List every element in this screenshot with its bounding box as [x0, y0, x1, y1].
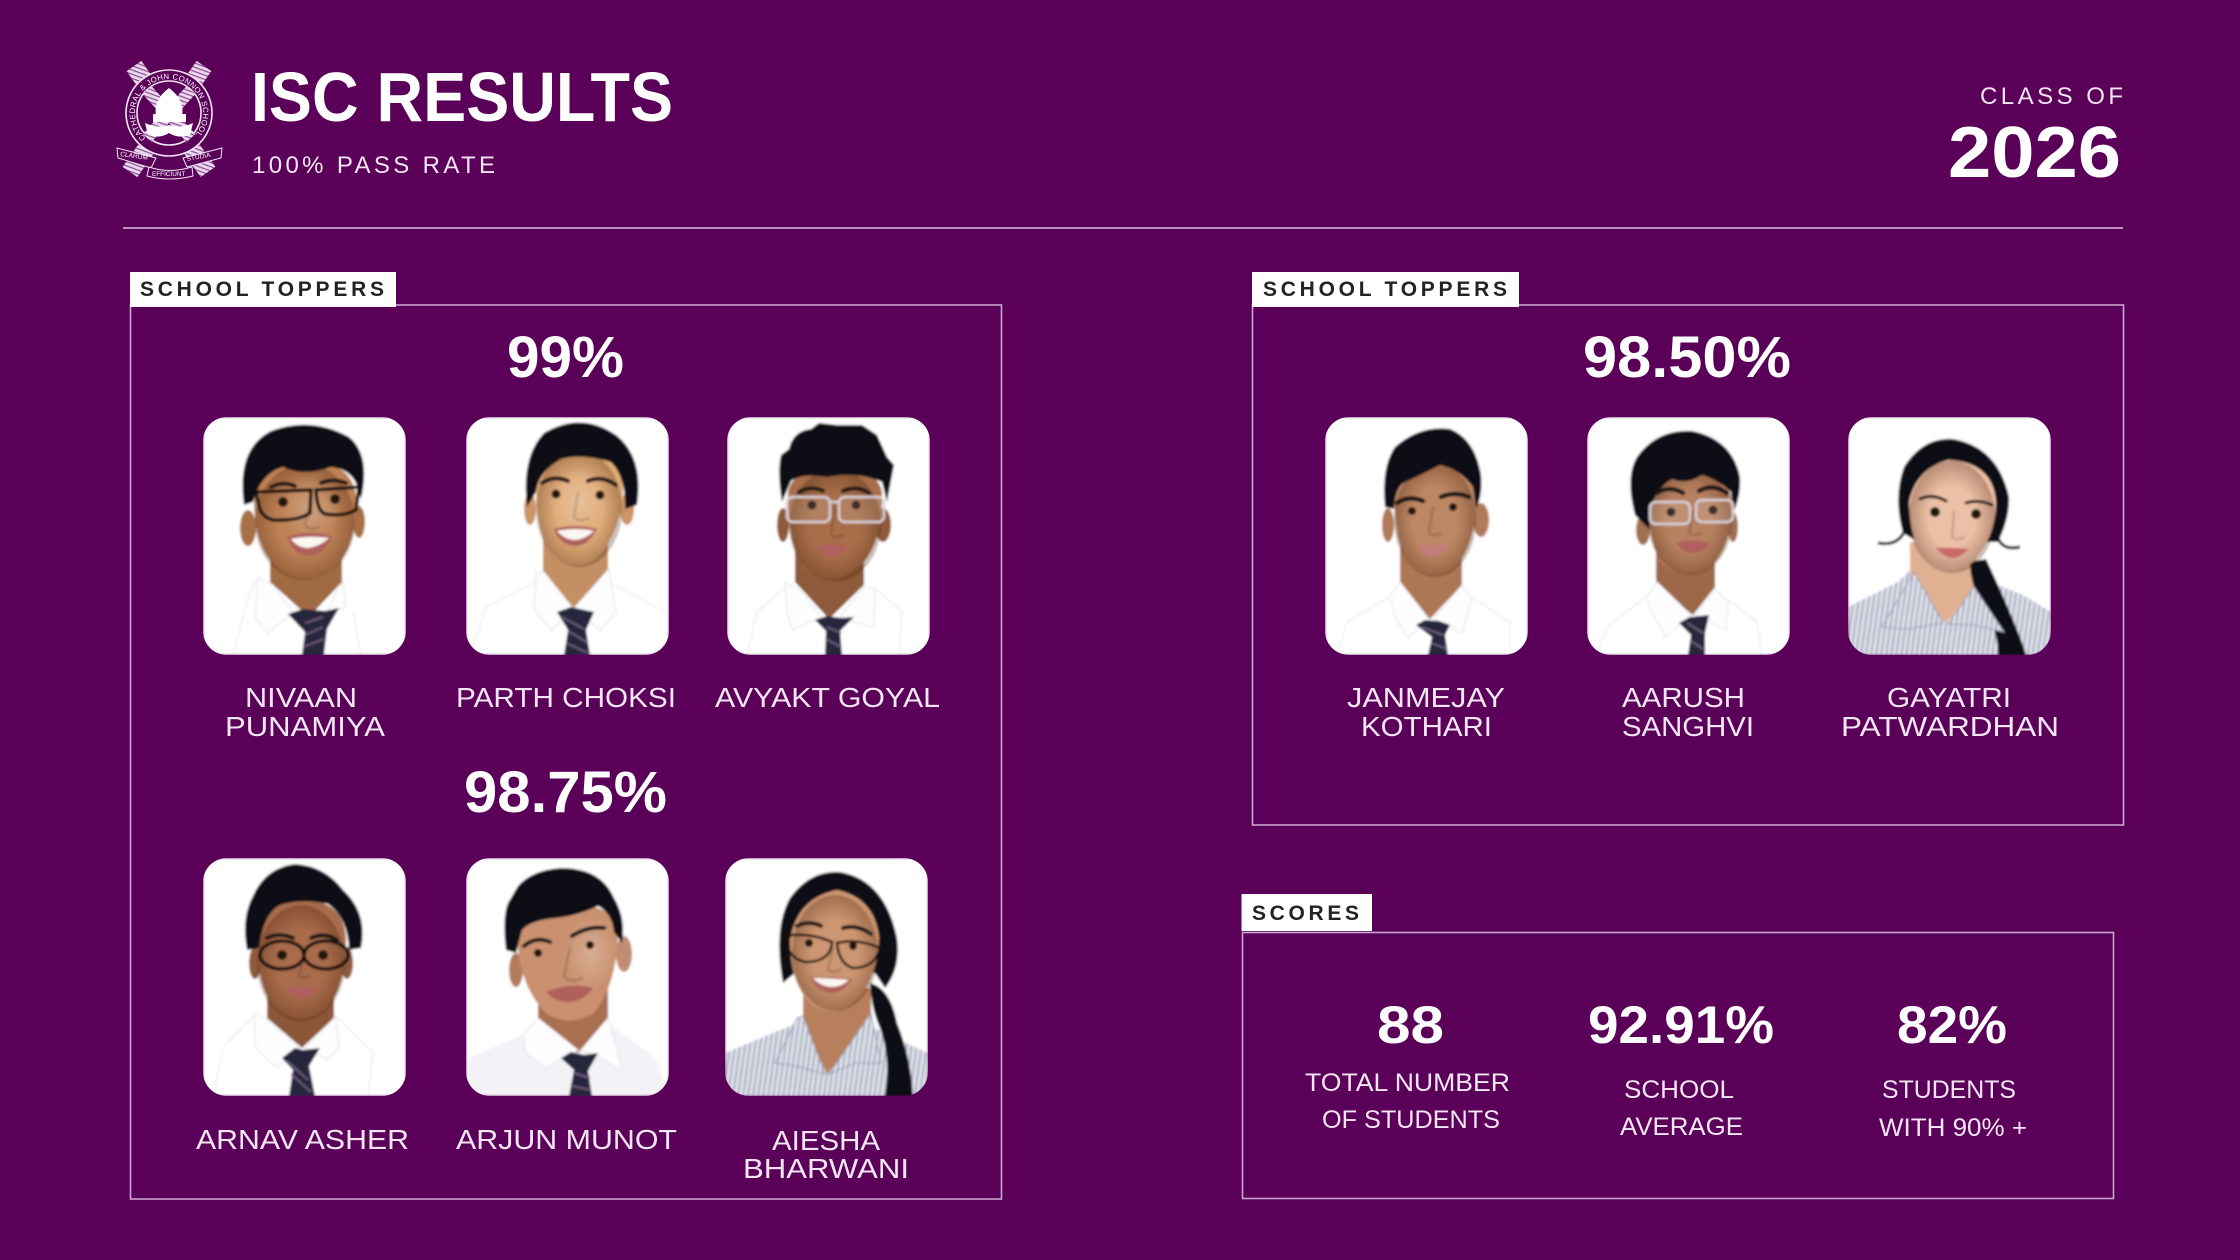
- name: Arnav Asher: ARNAV ASHER: [196, 1124, 409, 1155]
- header: [116, 58, 2123, 193]
- label: school toppers: [1252, 272, 1519, 307]
- name: Aarush Sanghvi: [1622, 682, 1754, 742]
- name: Gayatri Patwardhan: GAYATRI: [1887, 682, 2011, 713]
- name: Nivaan Punamiya: [225, 682, 386, 742]
- name: Aiesha Bharwani: BHARWANI: [743, 1153, 909, 1184]
- photo: Nivaan Punamiya: [203, 417, 406, 655]
- icon: school crest logo: [116, 60, 223, 180]
- stat: school average: SCHOOL: [1624, 1076, 1734, 1104]
- name: Aiesha Bharwani: [743, 1125, 909, 1184]
- name: Nivaan Punamiya: PUNAMIYA: [225, 711, 386, 742]
- score heading: 99%: 99%: [507, 325, 624, 390]
- class year: 2026: [1948, 113, 2121, 193]
- photo: Arjun Munot: [466, 858, 669, 1096]
- stat: total number of students: 88: [1377, 996, 1444, 1055]
- name: Gayatri Patwardhan: PATWARDHAN: [1841, 711, 2059, 742]
- stat: students with 90% plus: [1879, 996, 2027, 1142]
- name: Aarush Sanghvi: SANGHVI: [1622, 711, 1754, 742]
- score heading: 98.75%: 98.75%: [464, 760, 667, 825]
- stat: total number of students: OF STUDENTS: [1322, 1106, 1500, 1134]
- photo: Parth Choksi: [466, 417, 669, 655]
- label: school toppers: SCHOOL TOPPERS: [1263, 278, 1507, 301]
- name: Nivaan Punamiya: NIVAAN: [245, 682, 357, 713]
- icon: school crest logo: CATHEDRAL & JOHN CONNON SCHOOL: [130, 74, 208, 140]
- label: scores: [1242, 894, 1372, 931]
- stat: students with 90% plus: STUDENTS: [1882, 1076, 2016, 1104]
- name: Parth Choksi: PARTH CHOKSI: [456, 682, 676, 713]
- photo: Janmejay Kothari: [1325, 417, 1528, 655]
- photo: Arnav Asher: [203, 858, 406, 1096]
- label: school toppers: [130, 272, 396, 307]
- title: ISC RESULTS: [251, 58, 673, 136]
- photo: Aarush Sanghvi: [1587, 417, 1790, 655]
- stat: total number of students: TOTAL NUMBER: [1305, 1069, 1510, 1097]
- stat: students with 90% plus: 82%: [1897, 996, 2007, 1055]
- stat: total number of students: [1305, 996, 1510, 1134]
- name: Aarush Sanghvi: AARUSH: [1622, 682, 1745, 713]
- panel: scores: [1242, 894, 2114, 1198]
- icon: school crest logo: EFFICIUNT: [152, 171, 185, 178]
- photo: Aiesha Bharwani: [725, 858, 928, 1096]
- stat: school average: AVERAGE: [1620, 1113, 1743, 1141]
- stat: school average: 92.91%: [1588, 996, 1774, 1055]
- panel: school toppers left: [130, 272, 1002, 1199]
- panel: school toppers right: [1252, 272, 2124, 825]
- name: Janmejay Kothari: KOTHARI: [1361, 711, 1492, 742]
- class label: CLASS OF: [1980, 83, 2123, 110]
- label: school toppers: SCHOOL TOPPERS: [140, 278, 384, 301]
- name: Aiesha Bharwani: AIESHA: [772, 1125, 881, 1156]
- stat: school average: [1588, 996, 1774, 1141]
- name: Janmejay Kothari: JANMEJAY: [1347, 682, 1505, 713]
- name: Janmejay Kothari: [1347, 682, 1505, 742]
- name: Gayatri Patwardhan: [1841, 682, 2059, 742]
- stat: students with 90% plus: WITH 90% +: [1879, 1114, 2027, 1142]
- icon: school crest logo: STUDIA: [186, 152, 212, 163]
- photo: Avyakt Goyal: [727, 417, 930, 655]
- name: Arjun Munot: ARJUN MUNOT: [456, 1124, 677, 1155]
- photo: Gayatri Patwardhan: [1848, 417, 2051, 655]
- icon: school crest logo: CLARUM: [120, 151, 148, 162]
- score heading: 98.50%: 98.50%: [1583, 325, 1791, 390]
- label: scores: SCORES: [1252, 902, 1359, 925]
- name: Avyakt Goyal: AVYAKT GOYAL: [715, 682, 940, 713]
- subtitle: 100% PASS RATE: [252, 152, 495, 179]
